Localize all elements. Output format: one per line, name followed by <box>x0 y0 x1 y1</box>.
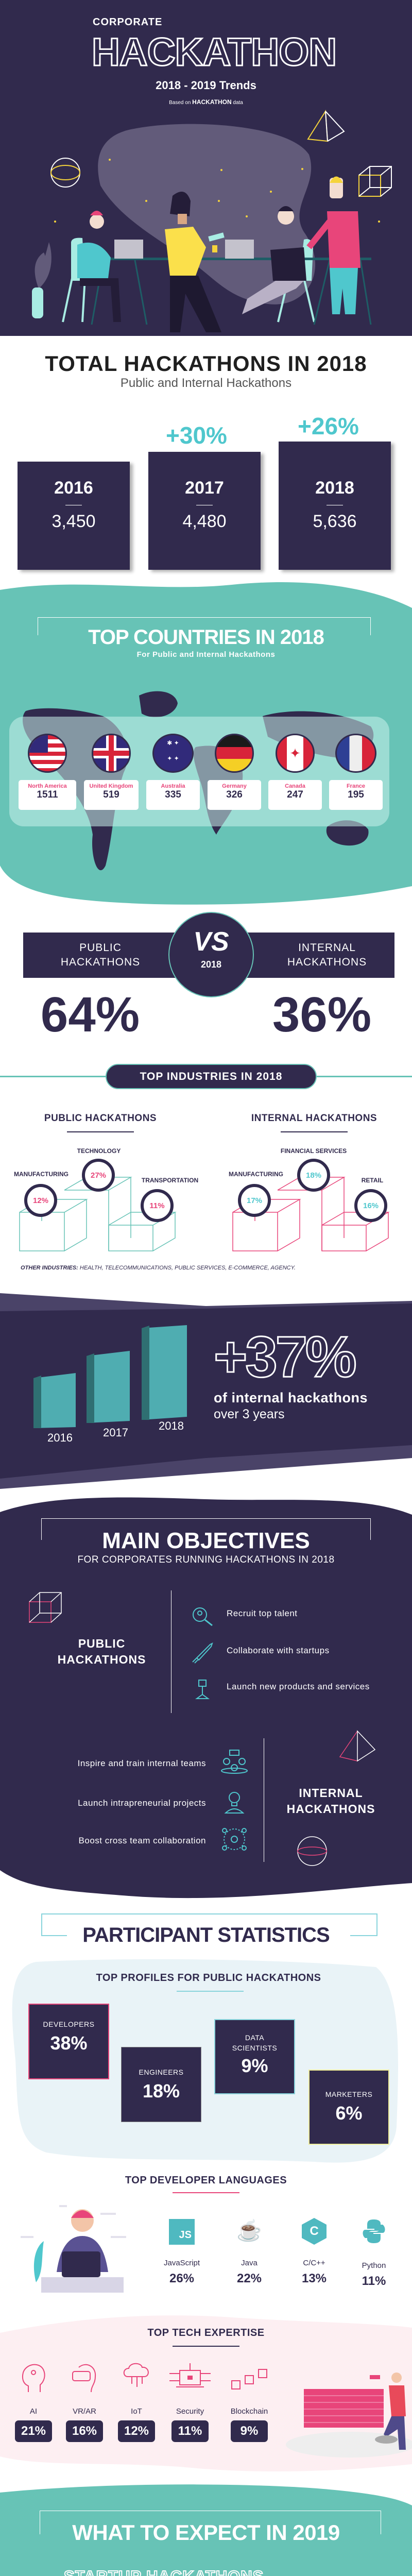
chart: internal industries podium: 18% <box>306 1171 321 1180</box>
panel: top countries background <box>0 582 412 905</box>
country: australia: ✱ ✦ <box>167 739 179 747</box>
chart: internal industries podium <box>229 1147 390 1251</box>
heading: top industries: TOP INDUSTRIES IN 2018 <box>140 1071 282 1082</box>
chart: internal industries podium: 16% <box>363 1201 379 1210</box>
stat card 2018 <box>279 442 391 570</box>
country: australia: Australia <box>161 783 185 789</box>
label: internal hackathons: INTERNAL <box>299 1786 363 1800</box>
card: developers: 38% <box>50 2032 88 2054</box>
tech: ai: AI <box>30 2407 37 2416</box>
card: developers <box>28 2004 109 2079</box>
vs circle: VS <box>193 927 229 957</box>
tech: blockchain: 9% <box>241 2424 258 2438</box>
subtitle: trends: 2018 - 2019 Trends <box>156 79 256 92</box>
chart: public industries podium: TECHNOLOGY <box>77 1147 121 1155</box>
languages row <box>164 2218 386 2288</box>
header illustration <box>32 110 392 332</box>
tech: blockchain <box>229 2361 270 2442</box>
country: canada: 247 <box>287 789 303 800</box>
icon: rocket <box>192 1642 213 1664</box>
language: java: ☕ <box>236 2219 262 2242</box>
tech: security: Security <box>176 2407 204 2416</box>
card: marketers: 6% <box>335 2103 363 2124</box>
card: marketers: MARKETERS <box>325 2090 372 2098</box>
tech: iot <box>116 2361 157 2442</box>
heading: top countries: For Public and Internal Hackathons <box>137 650 275 659</box>
growth label +30%: +30% <box>166 422 227 449</box>
tech: vr/ar: VR/AR <box>73 2407 96 2416</box>
heading: participant statistics <box>41 1913 377 1946</box>
language: python <box>353 2215 395 2289</box>
country: united kingdom: 519 <box>103 789 119 800</box>
label: public hackathons: PUBLIC <box>78 1637 125 1650</box>
heading: participant statistics: PARTICIPANT STATISTICS <box>82 1924 330 1946</box>
stat card 2017 <box>148 452 261 570</box>
bar chart: internal hackathons <box>33 1325 187 1444</box>
tech: ai: 21% <box>21 2424 46 2438</box>
stat card 2017: 2017 <box>185 478 224 498</box>
country: north america: 1511 <box>37 789 58 800</box>
illustration: wall builder <box>283 2367 412 2460</box>
country: germany <box>208 734 261 810</box>
language: c/c++: 13% <box>302 2272 327 2285</box>
heading: what to expect <box>0 2510 412 2546</box>
card: data scientists: DATA <box>245 2033 264 2042</box>
country: united kingdom <box>84 734 139 810</box>
stat: +37% internal <box>214 1335 368 1421</box>
subheading: internal hackathons: INTERNAL HACKATHONS <box>251 1113 377 1124</box>
panel: internal growth banner <box>0 1293 412 1489</box>
label: internal hackathons: INTERNAL <box>298 942 356 954</box>
stat card 2018: 2018 <box>315 478 354 498</box>
heading: total hackathons <box>45 351 367 390</box>
bar chart: internal hackathons: 2016 <box>47 1431 73 1444</box>
tech: ai <box>13 2361 54 2442</box>
country: united kingdom: United Kingdom <box>90 783 133 789</box>
stat card 2017: 4,480 <box>182 512 227 531</box>
language: java: 22% <box>237 2272 262 2285</box>
list: public objectives <box>192 1607 370 1699</box>
icon: launch <box>195 1680 210 1699</box>
subheading: top tech expertise: TOP TECH EXPERTISE <box>147 2327 265 2338</box>
subheading: public hackathons: PUBLIC HACKATHONS <box>44 1113 157 1124</box>
vs circle <box>168 912 254 997</box>
stat card 2016: 3,450 <box>52 512 96 531</box>
tech: security <box>169 2361 211 2442</box>
card: data scientists: 9% <box>241 2055 268 2076</box>
tech: blockchain: Blockchain <box>231 2407 268 2416</box>
tech expertise row <box>13 2361 270 2450</box>
country: france: France <box>347 783 365 789</box>
chart: public industries podium: MANUFACTURING <box>14 1171 68 1178</box>
country: australia: 335 <box>165 789 181 800</box>
tech: vr/ar <box>64 2361 105 2442</box>
country: north america: North America <box>28 783 67 789</box>
label: public hackathons: HACKATHONS <box>61 956 140 968</box>
panel: top profiles <box>5 1957 399 2164</box>
language: python: 11% <box>362 2274 386 2288</box>
chart: public industries podium <box>14 1147 198 1251</box>
list: internal objectives <box>78 1750 248 1851</box>
header background <box>0 0 412 336</box>
country: canada: ✦ <box>289 745 301 761</box>
label: internal hackathons: HACKATHONS <box>287 1802 375 1816</box>
chart: public industries podium: TRANSPORTATION <box>142 1177 198 1184</box>
heading: what to expect: WHAT TO EXPECT IN 2019 <box>72 2520 340 2545</box>
chart: public industries podium: 11% <box>149 1201 165 1210</box>
country: canada <box>268 734 322 810</box>
tech: iot: IoT <box>131 2407 142 2416</box>
label: internal hackathons <box>287 942 367 968</box>
stat: 64%: 64% <box>41 987 140 1042</box>
subheading: top profiles: TOP PROFILES FOR PUBLIC HACKATHONS <box>96 1972 321 1984</box>
icon: pyramid <box>339 1730 376 1762</box>
growth label +26%: +26% <box>298 413 359 439</box>
language: python: Python <box>362 2261 386 2270</box>
stat card 2016 <box>18 462 130 570</box>
item: launch intrapreneurial: Launch intrapreneurial projects <box>78 1798 206 1808</box>
stat card 2018: 5,636 <box>313 512 357 531</box>
vs circle: 2018 <box>201 959 221 970</box>
heading: top countries: TOP COUNTRIES IN 2018 <box>88 626 324 649</box>
icon: wireframe cube <box>29 1592 62 1623</box>
item: inspire: Inspire and train internal teams <box>78 1758 206 1768</box>
panel: top tech expertise background <box>0 2312 412 2475</box>
language: c/c++: C <box>310 2224 319 2238</box>
heading: main objectives: FOR CORPORATES RUNNING HACKATHONS IN 2018 <box>77 1554 335 1565</box>
icon: search person <box>193 1607 213 1626</box>
subheading: top developer languages: TOP DEVELOPER LANGUAGES <box>125 2175 287 2186</box>
chart: internal industries podium: RETAIL <box>362 1177 383 1184</box>
icon: network <box>222 1828 247 1851</box>
item: launch: Launch new products and services <box>227 1682 370 1691</box>
country: australia: ✦ ✦ <box>167 755 179 762</box>
language: javascript <box>161 2215 203 2286</box>
chart: public industries podium: 12% <box>33 1196 48 1205</box>
country: germany: Germany <box>222 783 247 789</box>
panel: what to expect background <box>0 2482 412 2576</box>
country: canada: Canada <box>285 783 305 789</box>
label: public hackathons <box>61 942 140 968</box>
tech: security: 11% <box>178 2424 202 2438</box>
country panel <box>9 717 389 826</box>
country: australia <box>146 734 200 810</box>
illustration: developer <box>21 2200 134 2295</box>
language: java <box>228 2215 270 2286</box>
chart: internal industries podium: MANUFACTURING <box>229 1171 283 1178</box>
kicker: corporate: CORPORATE <box>93 16 162 28</box>
heading: top industries <box>0 1064 412 1089</box>
heading: top countries <box>38 617 371 659</box>
country: france <box>329 734 383 810</box>
chart: public industries podium: 27% <box>91 1171 106 1180</box>
stat: 36%: 36% <box>272 987 371 1042</box>
heading: total hackathons: TOTAL HACKATHONS IN 2018 <box>45 351 367 376</box>
language: javascript: JS <box>179 2229 192 2241</box>
tech: iot: 12% <box>124 2424 149 2438</box>
label: public hackathons: HACKATHONS <box>58 1653 146 1666</box>
language: java: Java <box>241 2259 258 2267</box>
stat: +37% internal: of internal hackathons <box>214 1390 368 1405</box>
bar chart: internal hackathons: 2018 <box>159 1419 184 1432</box>
panel: main objectives background <box>0 1497 412 1898</box>
language: c/c++: C/C++ <box>303 2259 325 2267</box>
language: c/c++ <box>302 2218 327 2285</box>
card: engineers <box>121 2047 201 2122</box>
heading: total hackathons: Public and Internal Hackathons <box>121 376 291 390</box>
icon: idea <box>225 1792 244 1814</box>
card: data scientists <box>214 2019 295 2094</box>
note: other industries: OTHER INDUSTRIES: HEALTH, TELECOMMUNICATIONS, PUBLIC SERVICES, E-COMMERCE, AGENCY. <box>21 1265 296 1271</box>
item: boost: Boost cross team collaboration <box>79 1836 206 1845</box>
language: javascript: JavaScript <box>164 2259 200 2267</box>
label: internal hackathons <box>287 1786 375 1816</box>
card: data scientists: SCIENTISTS <box>232 2044 277 2052</box>
item: recruit: Recruit top talent <box>227 1608 298 1618</box>
card: engineers: ENGINEERS <box>139 2068 183 2076</box>
item: collaborate: Collaborate with startups <box>227 1646 330 1655</box>
chart: internal industries podium: FINANCIAL SERVICES <box>281 1147 347 1155</box>
bar chart: internal hackathons: 2017 <box>103 1426 128 1439</box>
heading: main objectives: MAIN OBJECTIVES <box>102 1528 310 1553</box>
tech: vr/ar: 16% <box>72 2424 97 2438</box>
country: north america <box>19 734 76 810</box>
title: corporate hackathon <box>92 16 336 106</box>
icon: team <box>221 1750 248 1774</box>
label: internal hackathons: HACKATHONS <box>287 956 367 968</box>
language: javascript: 26% <box>169 2272 194 2285</box>
label: public hackathons <box>58 1637 146 1666</box>
main title: hackathon: HACKATHON <box>92 30 336 74</box>
stat: +37% internal: over 3 years <box>214 1407 285 1421</box>
country: germany: 326 <box>226 789 243 800</box>
card: developers: DEVELOPERS <box>43 2020 94 2028</box>
icon: sphere <box>297 1836 327 1866</box>
card: marketers <box>308 2070 389 2145</box>
card: engineers: 18% <box>143 2080 180 2102</box>
heading: main objectives <box>41 1518 371 1565</box>
vs banner <box>23 912 394 1042</box>
source note: Based on HACKATHON data <box>169 98 243 106</box>
label: public hackathons: PUBLIC <box>79 942 122 954</box>
chart: internal industries podium: 17% <box>247 1196 262 1205</box>
stat card 2016: 2016 <box>54 478 93 498</box>
country: france: 195 <box>348 789 364 800</box>
